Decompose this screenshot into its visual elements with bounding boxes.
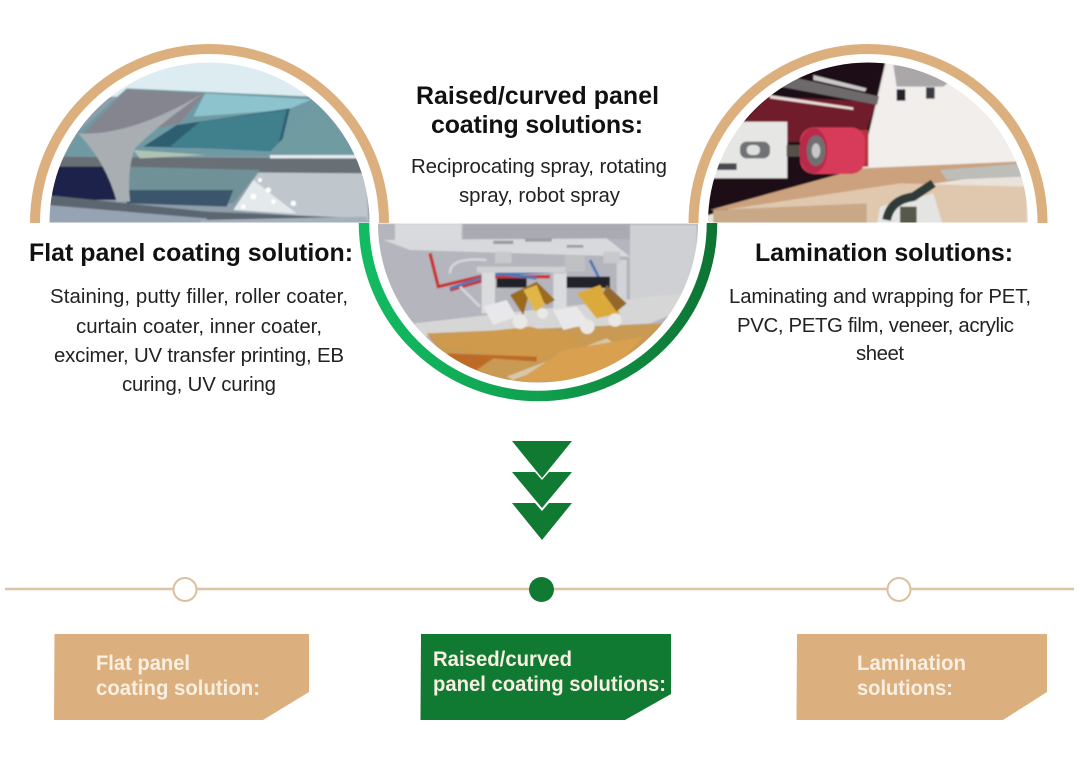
timeline: [5, 577, 1074, 602]
text: flat panel description: curing, UV curing: [122, 374, 276, 396]
marker: flat panel: [174, 578, 196, 601]
label tag: flat panel: [54, 634, 309, 720]
icon: triple down chevron arrow: [512, 441, 572, 540]
label tag: raised/curved: panel coating solutions:: [433, 672, 666, 696]
text: raised/curved panel description: spray, robot spray: [459, 185, 621, 207]
heading: lamination: Lamination solutions:: [755, 239, 1013, 267]
text: flat panel description: [50, 286, 348, 396]
text: raised/curved panel description: [411, 156, 667, 207]
photo: reciprocating spray head: [377, 223, 703, 390]
text: lamination description: PVC, PETG film, veneer, acrylic: [737, 315, 1014, 337]
marker: raised/curved active: [529, 577, 554, 602]
heading: raised/curved panel: Raised/curved panel: [416, 82, 659, 110]
arc: lamination tan ring: [694, 49, 1042, 223]
label tag: flat panel: coating solution:: [96, 676, 260, 700]
photo: lamination roller: [703, 57, 1037, 227]
text: flat panel description: excimer, UV transfer printing, EB: [54, 345, 344, 367]
arc: raised/curved green ring: [364, 223, 712, 396]
label tag: flat panel: Flat panel: [96, 651, 190, 675]
text: flat panel description: Staining, putty filler, roller coater,: [50, 286, 348, 308]
text: raised/curved panel description: Reciprocating spray, rotating: [411, 156, 667, 178]
arc: flat panel tan ring: [35, 49, 384, 223]
text: lamination description: sheet: [856, 343, 904, 365]
photo: flat panel curtain coating: [47, 57, 373, 230]
label tag: lamination: solutions:: [857, 676, 953, 700]
heading: raised/curved panel: [416, 82, 659, 139]
heading: raised/curved panel: coating solutions:: [431, 111, 643, 139]
heading: flat panel: Flat panel coating solution:: [29, 239, 353, 267]
label tag: raised/curved: [420, 634, 671, 720]
label tag: lamination: [796, 634, 1047, 720]
text: flat panel description: curtain coater, inner coater,: [76, 316, 322, 338]
label tag: lamination: Lamination: [857, 651, 966, 675]
marker: lamination: [888, 578, 910, 601]
label tag: raised/curved: Raised/curved: [433, 647, 572, 671]
text: lamination description: [729, 286, 1031, 365]
text: lamination description: Laminating and wrapping for PET,: [729, 286, 1031, 308]
